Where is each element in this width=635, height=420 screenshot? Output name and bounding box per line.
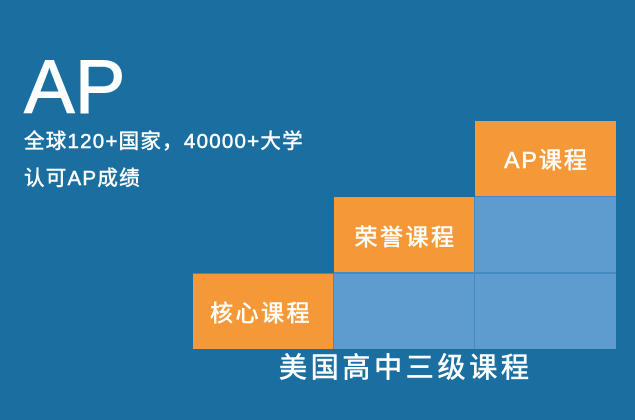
text line: AP scores: 认可AP成绩 — [24, 167, 141, 190]
cell: blue row 3 column 3 — [475, 274, 616, 349]
cell: core course: 核心课程 — [210, 300, 312, 326]
cell: core course — [193, 274, 333, 349]
text line: countries and universities: 全球120+国家，40000+大学 — [24, 130, 304, 153]
panel: course staircase grid — [193, 121, 616, 349]
cell: honors course — [334, 197, 474, 272]
title: AP — [24, 45, 125, 130]
caption: three levels of US high school courses: 美国高中三级课程 — [279, 352, 533, 383]
cell: honors course: 荣誉课程 — [354, 224, 456, 250]
text block: recognition — [24, 130, 304, 190]
cell: AP course — [475, 121, 616, 196]
cell: blue row 2 column 3 — [475, 197, 616, 272]
cell: blue row 3 column 2 — [334, 274, 474, 349]
cell: AP course: AP课程 — [504, 147, 589, 173]
